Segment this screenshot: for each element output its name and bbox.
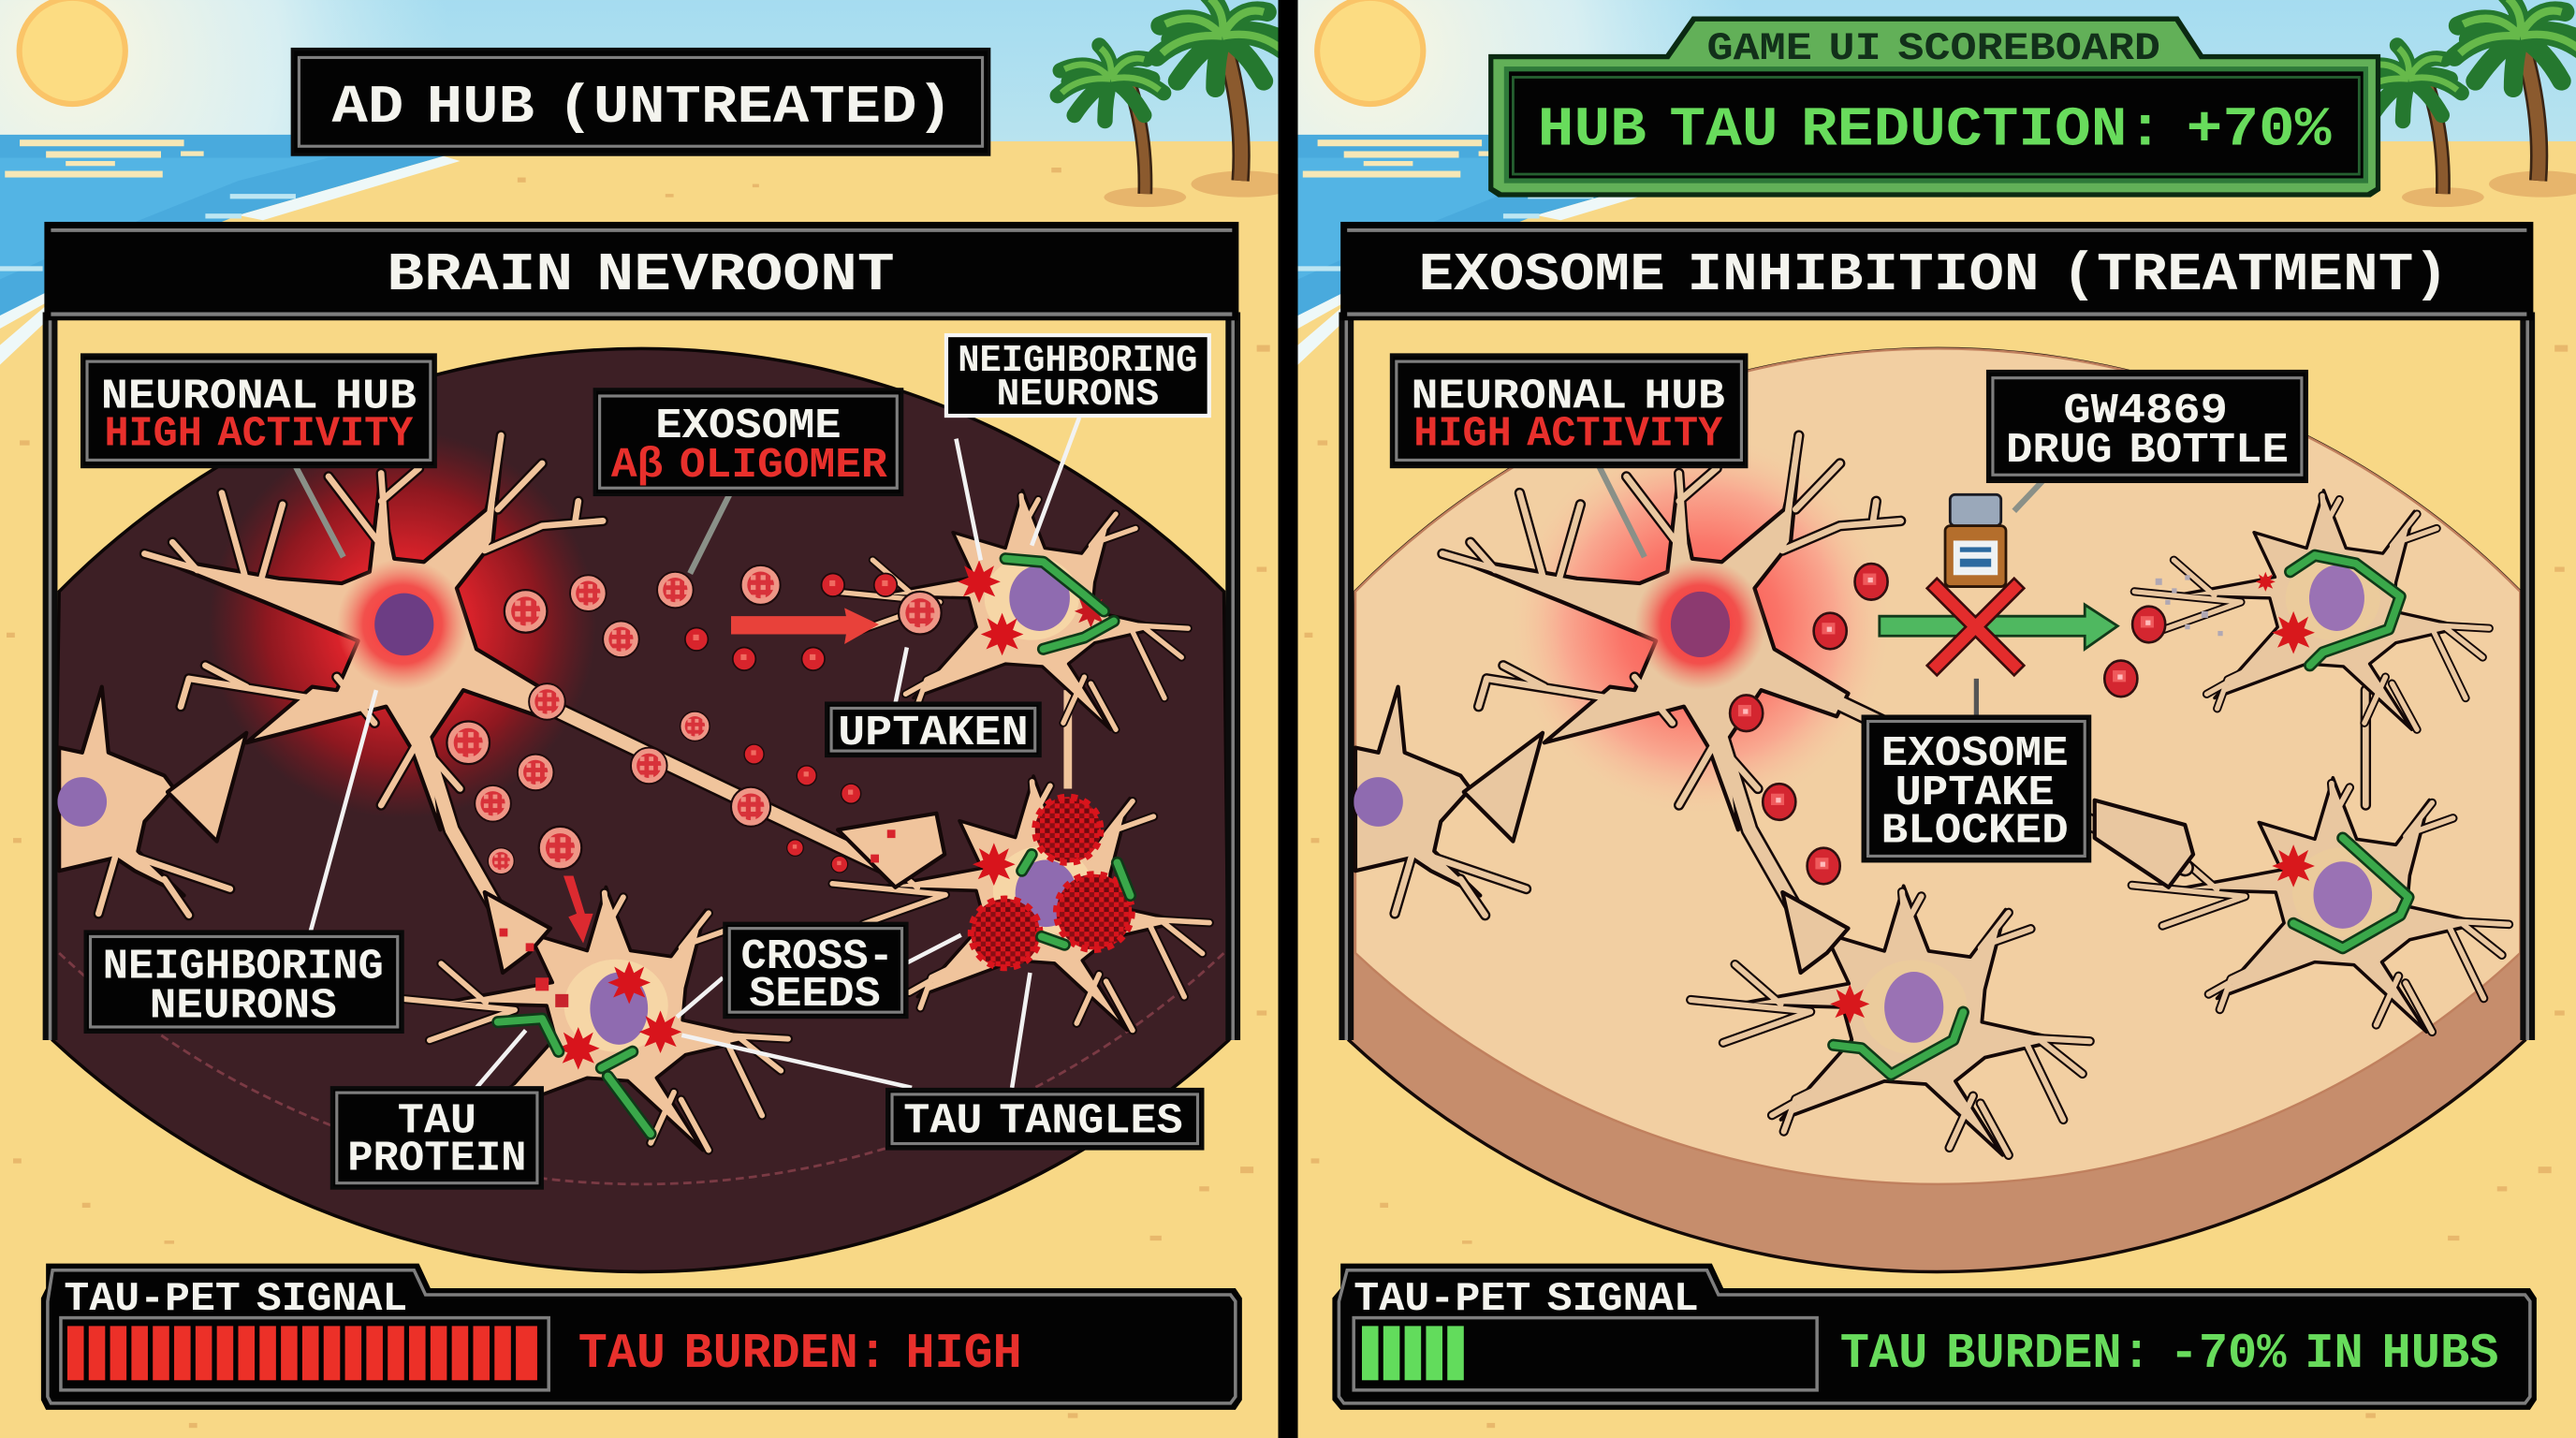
- label: exosome uptake blocked: [1863, 716, 2089, 861]
- label: neighboring neurons top: NEURONS: [996, 374, 1159, 417]
- label: neuronal hub high activity: [1392, 355, 1747, 466]
- label: tau tangles: TAU TANGLES: [903, 1096, 1183, 1145]
- label: exosome A-beta oligomer: [594, 389, 902, 494]
- brain disc: dark diseased tissue: [52, 348, 1229, 1271]
- icon: red X block: [1937, 588, 2014, 666]
- title: AD hub untreated: AD HUB (UNTREATED): [332, 78, 953, 139]
- exosome debris near upper neuron: [2156, 575, 2223, 636]
- neuronal hub with axons: [1442, 435, 2193, 973]
- label: neighboring neurons lower: NEURONS: [150, 981, 337, 1030]
- label: neuronal hub high activity: NEURONAL HUB: [1412, 372, 1725, 420]
- label: cross-seeds: CROSS-: [741, 932, 894, 981]
- label: neighboring neurons top: [946, 335, 1209, 417]
- label: exosome uptake blocked: UPTAKE: [1895, 769, 2055, 817]
- label: neuronal hub high activity: NEURONAL HUB: [101, 372, 417, 420]
- neuron at left edge: [57, 687, 246, 916]
- label: exosome A-beta oligomer: Aβ OLIGOMER: [611, 441, 887, 490]
- connector between neighboring neurons: [1065, 690, 1070, 788]
- tau-PET signal panel: high: TAU BURDEN: HIGH: [578, 1326, 1022, 1382]
- connector between neighboring neurons: [2363, 690, 2369, 805]
- beach scene right: [1298, 0, 2576, 1438]
- tau protein strands: left panel: [498, 559, 1131, 1134]
- tau-PET signal panel: reduced: TAU-PET SIGNAL: [1354, 1276, 1699, 1323]
- label: GW4869 drug bottle: GW4869: [2063, 387, 2228, 435]
- neighbor neuron: upper right: [833, 491, 1188, 729]
- label: neighboring neurons top: NEIGHBORING: [958, 340, 1197, 383]
- label: neuronal hub high activity: [82, 355, 435, 466]
- arrow: blocked transfer: [1880, 605, 2117, 649]
- label: cross-seeds: [724, 923, 907, 1019]
- icon: GW4869 drug bottle: [1945, 494, 2006, 587]
- neighbor neuron: upper right: [2134, 491, 2489, 729]
- hub activity glow: [1533, 464, 1868, 792]
- label: exosome A-beta oligomer: EXOSOME: [655, 402, 842, 450]
- exosomes: A-beta oligomers: [446, 565, 942, 874]
- panel frame and heading: exosome inhibition: [1339, 222, 2535, 1040]
- panel frame and heading: brain neuroont: [43, 222, 1240, 1040]
- label: exosome uptake blocked: BLOCKED: [1881, 807, 2069, 856]
- panel frame and heading: exosome inhibition: EXOSOME INHIBITION (TREATMENT): [1419, 245, 2449, 306]
- right panel: exosome inhibition treatment: [1298, 0, 2576, 1438]
- neuron at left edge: [1354, 687, 1543, 916]
- hub activity glow: [209, 431, 596, 818]
- label: neighboring neurons lower: [85, 932, 402, 1032]
- neighbor neuron: lower right: [2132, 778, 2509, 1032]
- label: neuronal hub high activity: HIGH ACTIVITY: [1413, 410, 1723, 459]
- brain disc: healthy tissue: [1349, 348, 2525, 1271]
- label: cross-seeds: SEEDS: [749, 970, 881, 1019]
- scoreboard: hub tau reduction: GAME UI SCOREBOARD: [1707, 26, 2160, 71]
- tau-PET signal panel: high: [41, 1264, 1242, 1410]
- left panel: AD hub untreated: [0, 0, 1298, 1438]
- label: tau protein: PROTEIN: [347, 1135, 527, 1183]
- neighbor neuron: lower center: [1690, 886, 2090, 1155]
- label: GW4869 drug bottle: DRUG BOTTLE: [2006, 426, 2289, 475]
- exosomes: blocked: [1730, 564, 2165, 884]
- pointer lines: left panel: [294, 418, 1079, 1088]
- panel frame and heading: brain neuroont: BRAIN NEVROONT: [387, 245, 895, 306]
- arrow: exosome transfer: [731, 608, 879, 644]
- label: uptaken: UPTAKEN: [838, 709, 1029, 757]
- neighbor neuron: lower right: [832, 776, 1209, 1030]
- neighbor neuron: lower center: [398, 887, 788, 1151]
- signal meter: 5 green bars: [1362, 1326, 1464, 1380]
- scoreboard: hub tau reduction: [1488, 17, 2380, 198]
- tau-PET signal panel: high: TAU-PET SIGNAL: [64, 1276, 407, 1323]
- tau-PET signal panel: reduced: TAU BURDEN: -70% IN HUBS: [1840, 1326, 2499, 1382]
- title: AD hub untreated: [292, 50, 989, 154]
- label: neighboring neurons lower: NEIGHBORING: [103, 942, 384, 990]
- label: GW4869 drug bottle: [1988, 372, 2306, 481]
- pointer lines: right panel: [1599, 465, 2043, 716]
- neuronal hub with axons: [144, 435, 944, 973]
- tau-PET signal panel: reduced: [1332, 1264, 2537, 1410]
- label: neuronal hub high activity: HIGH ACTIVITY: [104, 410, 414, 459]
- beach scene left: [0, 0, 1298, 1438]
- arrow: exosome entering lower neuron: [564, 875, 593, 943]
- tau proteins and small aggregates: right panel: [1830, 555, 2408, 1075]
- signal meter: 22 red bars: [67, 1326, 537, 1380]
- label: exosome uptake blocked: EXOSOME: [1881, 729, 2069, 778]
- scoreboard: hub tau reduction: HUB TAU REDUCTION: +70%: [1538, 97, 2332, 161]
- tau tangles and spots in neurons: [500, 561, 1132, 1070]
- label: tau protein: TAU: [398, 1096, 476, 1145]
- label: tau protein: [332, 1088, 542, 1188]
